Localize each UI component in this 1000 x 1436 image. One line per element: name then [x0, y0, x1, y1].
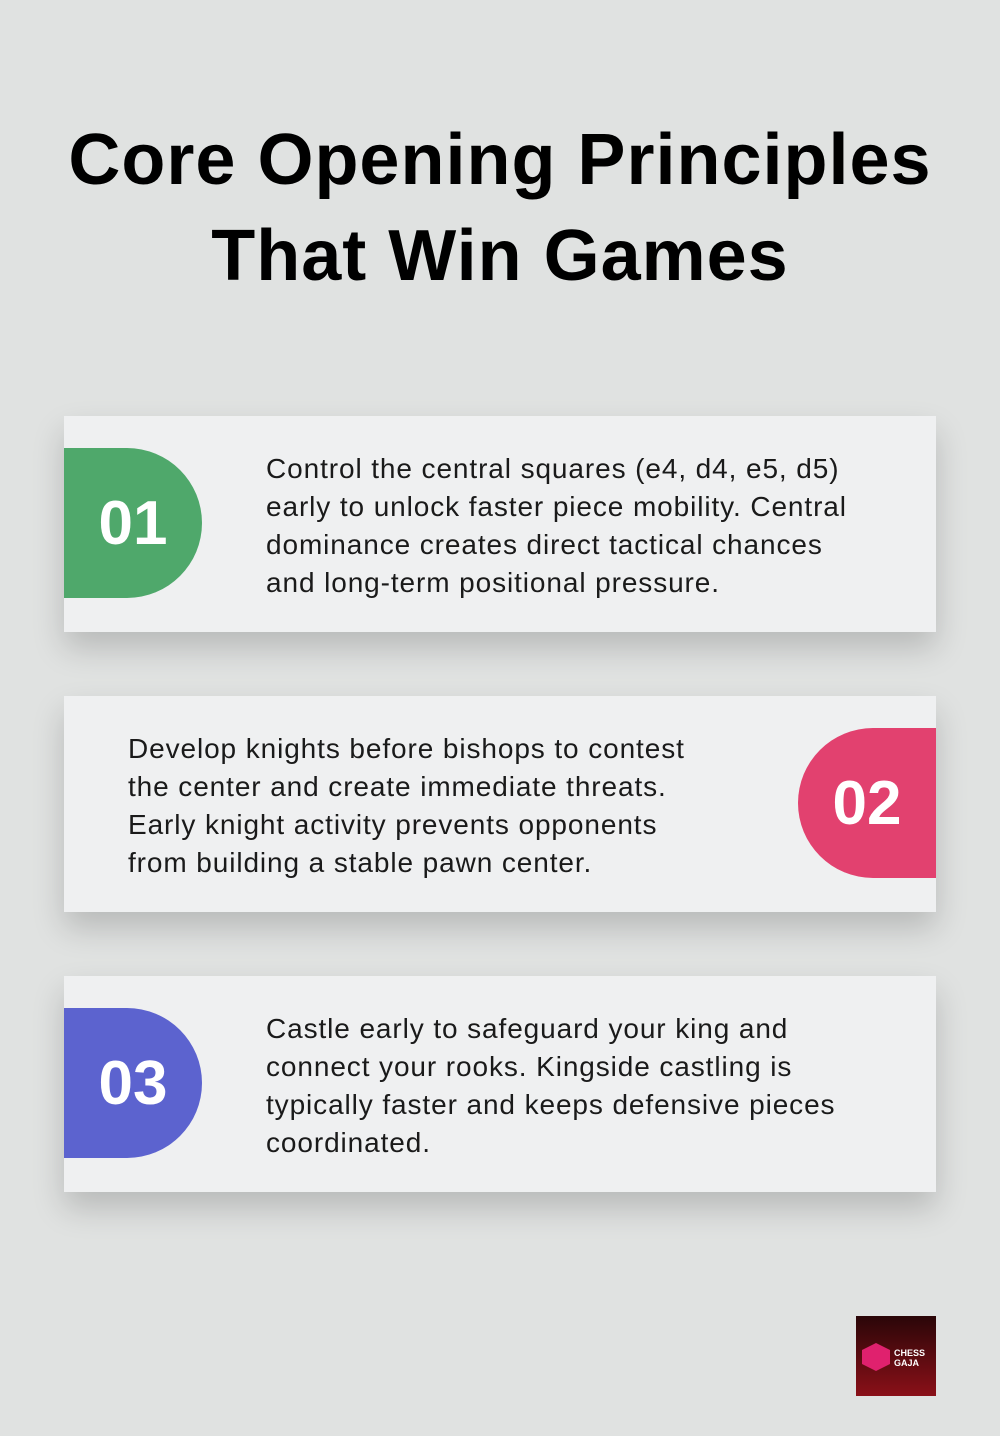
- text 3: connect your rooks. Kingside castling is: [266, 1051, 792, 1082]
- panel: step 1: [64, 416, 936, 632]
- panel: step 3: [64, 976, 936, 1192]
- badge 02: [798, 728, 936, 878]
- text 3: Castle early to safeguard your king and: [266, 1013, 788, 1044]
- icon: hexagon: [862, 1343, 890, 1371]
- text 1: Control the central squares (e4, d4, e5, d5): [266, 453, 839, 484]
- text 1: dominance creates direct tactical chances: [266, 529, 823, 560]
- badge 01: 01: [99, 488, 167, 558]
- text 2: Develop knights before bishops to contest: [128, 733, 685, 764]
- text 2: the center and create immediate threats.: [128, 771, 667, 802]
- text 3: typically faster and keeps defensive pieces: [266, 1089, 835, 1120]
- text 1: [266, 453, 847, 598]
- text 3: [266, 1013, 835, 1158]
- title: [68, 120, 932, 296]
- logo text: GAJA: [894, 1358, 919, 1368]
- title: Core Opening Principles: [68, 120, 932, 200]
- text 2: [128, 733, 685, 878]
- text 2: Early knight activity prevents opponents: [128, 809, 657, 840]
- logo: [856, 1316, 936, 1396]
- text 3: coordinated.: [266, 1127, 431, 1158]
- badge 02: 02: [833, 768, 901, 838]
- badge 01: [64, 448, 202, 598]
- panel: step 2: [64, 696, 936, 912]
- text 1: and long-term positional pressure.: [266, 567, 720, 598]
- badge 03: [64, 1008, 202, 1158]
- logo text: CHESS: [894, 1348, 925, 1358]
- logo text: [894, 1348, 925, 1368]
- badge 03: 03: [99, 1048, 167, 1118]
- text 1: early to unlock faster piece mobility. Central: [266, 491, 847, 522]
- text 2: from building a stable pawn center.: [128, 847, 592, 878]
- title: That Win Games: [211, 216, 789, 296]
